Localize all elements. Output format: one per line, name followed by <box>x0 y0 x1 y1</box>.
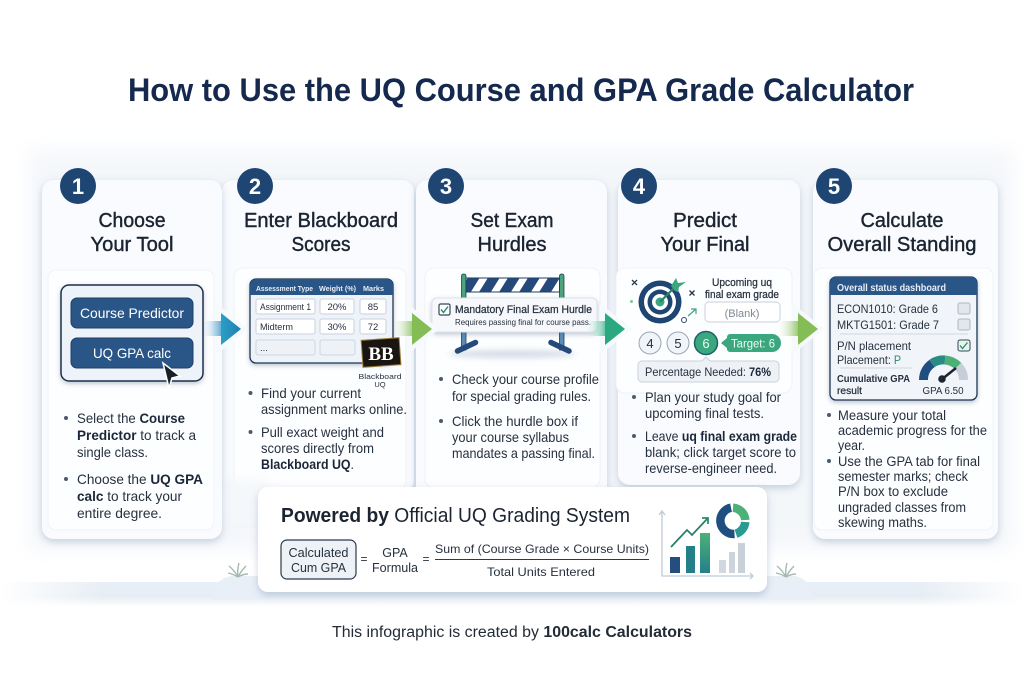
hurdle callout: Requires passing final for course pass. <box>455 317 591 327</box>
hurdle callout <box>432 298 597 332</box>
assessment table: 20% <box>327 302 347 313</box>
step 5 bullets: Use the GPA tab for final <box>838 454 980 469</box>
icon: cursor <box>163 363 180 388</box>
panel 4 inner <box>616 268 792 393</box>
step 3 heading <box>470 210 554 256</box>
step 3 number: 3 <box>440 174 452 199</box>
step 3 bullets: your course syllabus <box>452 429 569 445</box>
status dashboard: MKTG1501: Grade 7 <box>837 318 939 332</box>
step 5 heading: Overall Standing <box>828 234 976 256</box>
button: UQ GPA calc: UQ GPA calc <box>93 345 171 361</box>
step 4 heading: Your Final <box>660 234 750 256</box>
Blackboard logo: Blackboard <box>358 372 402 381</box>
assessment table: Marks <box>363 284 384 293</box>
step 1 bullets: single class. <box>77 444 148 460</box>
step 4 bullets: Leave uq final exam grade <box>645 428 797 444</box>
upcoming final exam grade field: final exam grade <box>705 289 779 301</box>
panel: step 3 <box>416 168 607 500</box>
status dashboard: ECON1010: Grade 6 <box>837 302 938 316</box>
step 5 heading: Calculate <box>860 210 944 232</box>
step 1 heading: Your Tool <box>90 234 174 256</box>
step 1 number <box>60 168 96 204</box>
grade selector: 5 <box>674 336 682 351</box>
step 1 bullets: Predictor to track a <box>77 427 196 443</box>
panel: step 1 <box>42 168 998 641</box>
grade selector: 6 <box>702 336 710 351</box>
step 1 bullets <box>64 410 203 521</box>
assessment table <box>250 279 393 363</box>
step 2 bullets: Pull exact weight and <box>261 424 384 440</box>
formula: Sum of (Course Grade × Course Units) <box>435 542 649 556</box>
step 3 heading: Hurdles <box>478 234 546 256</box>
assessment table: 30% <box>327 322 347 333</box>
panel 1 inner <box>48 270 214 530</box>
percentage needed <box>638 357 779 382</box>
step 2 heading <box>244 210 398 256</box>
step 2 bullets: assignment marks online. <box>261 401 407 417</box>
step 1 bullets: entire degree. <box>77 505 162 521</box>
soft fade below step 2 <box>212 480 268 520</box>
hurdle callout: Mandatory Final Exam Hurdle <box>455 304 592 316</box>
step 1 bullets: calc to track your <box>77 488 182 504</box>
arrow: step 1 to 2 <box>204 306 246 352</box>
icon: grass right <box>776 563 796 577</box>
step 4 bullets: blank; click target score to <box>645 444 796 460</box>
icon: grass left <box>228 563 248 577</box>
assessment table: Assessment Type <box>256 284 313 293</box>
panel: official grading system <box>258 487 767 592</box>
step 4 number: 4 <box>633 174 646 199</box>
step 1 heading <box>90 210 174 256</box>
assessment table: ... <box>260 343 268 354</box>
step 5 bullets: skewing maths. <box>838 515 927 530</box>
step 5 bullets <box>827 408 987 530</box>
step 4 bullets: Plan your study goal for <box>645 389 781 405</box>
step 3 number <box>428 168 464 204</box>
Blackboard logo <box>358 338 402 389</box>
arrow: step 3 to 4 <box>588 306 630 352</box>
step 1 heading: Choose <box>98 210 166 232</box>
status dashboard: Overall status dashboard <box>837 283 946 294</box>
formula: = <box>422 552 430 566</box>
step 5 heading <box>828 210 976 256</box>
Blackboard logo: UQ <box>374 380 386 389</box>
step 2 bullets: scores directly from <box>261 440 374 456</box>
panel: step 4 <box>616 168 800 485</box>
formula: = <box>360 552 368 566</box>
chart icon <box>659 508 753 579</box>
step 3 bullets: mandates a passing final. <box>452 445 595 461</box>
step 3 bullets: Click the hurdle box if <box>452 413 578 429</box>
button: course predictor: Course Predictor <box>80 305 184 321</box>
panel: step 2 <box>222 168 414 492</box>
step 4 bullets: upcoming final tests. <box>645 405 764 421</box>
step 1 bullets: Select the Course <box>77 410 185 426</box>
formula: Calculated <box>288 546 349 560</box>
step 5 bullets: P/N box to exclude <box>838 484 948 499</box>
status dashboard: GPA 6.50 <box>922 386 964 397</box>
formula: GPA <box>382 546 408 560</box>
formula <box>281 540 649 579</box>
upcoming final exam grade field <box>705 277 780 322</box>
assessment table: Weight (%) <box>319 284 356 293</box>
step 4 heading: Predict <box>673 210 737 232</box>
status dashboard: result <box>837 385 862 397</box>
footer credit: This infographic is created by 100calc Calculators <box>332 624 692 641</box>
assessment table: 85 <box>368 302 378 313</box>
step 1 number: 1 <box>72 174 84 199</box>
step 4 number <box>621 168 657 204</box>
step 4 bullets: reverse-engineer need. <box>645 460 777 476</box>
step 5 number: 5 <box>828 174 840 199</box>
panel 3 inner <box>425 268 600 488</box>
formula: Cum GPA <box>291 561 347 575</box>
panel 2 inner <box>234 268 406 490</box>
percentage needed: Percentage Needed: 76% <box>645 365 771 379</box>
step 5 bullets: semester marks; check <box>838 469 968 484</box>
step 5 bullets: academic progress for the <box>838 423 987 438</box>
button: UQ GPA calc <box>71 338 193 368</box>
status dashboard: P/N placement <box>837 339 912 353</box>
panel 5 inner <box>814 268 993 530</box>
arrow: step 2 to 3 <box>395 306 437 352</box>
assessment table: 72 <box>368 322 378 333</box>
hurdle illustration <box>448 274 576 358</box>
status dashboard: Placement: P <box>837 353 901 367</box>
status dashboard <box>830 277 977 400</box>
panel: step 5 <box>813 168 998 539</box>
title: How to Use the UQ Course and GPA Grade Calculator <box>128 72 914 108</box>
step 3 heading: Set Exam <box>470 210 554 232</box>
assessment table: Midterm <box>260 322 293 333</box>
upcoming final exam grade field: (Blank) <box>725 308 759 320</box>
button: course predictor <box>71 298 193 328</box>
step 1 bullets: Choose the UQ GPA <box>77 471 203 487</box>
status dashboard: Cumulative GPA <box>837 373 910 385</box>
upcoming final exam grade field: Upcoming uq <box>712 277 772 289</box>
formula: Formula <box>372 561 418 575</box>
step 2 bullets <box>248 385 407 472</box>
icon: target with arrow <box>630 278 696 324</box>
step 5 bullets: ungraded classes from <box>838 500 966 515</box>
assessment table: Assignment 1 <box>260 302 311 313</box>
step 3 bullets: Check your course profile <box>452 371 599 387</box>
grade selector: 4 <box>646 336 654 351</box>
step 2 bullets: Blackboard UQ. <box>261 456 354 472</box>
step 5 number <box>816 168 852 204</box>
step 4 bullets <box>632 389 797 476</box>
gauge <box>923 360 964 382</box>
step 3 bullets <box>439 371 599 461</box>
grade selector <box>639 332 781 354</box>
step 4 heading <box>660 210 750 256</box>
step 2 heading: Enter Blackboard <box>244 210 398 232</box>
formula: Total Units Entered <box>487 565 595 579</box>
grade selector: Target: 6 <box>731 338 775 350</box>
tool selector <box>61 285 203 388</box>
panel heading: Powered by Official UQ Grading System <box>281 505 630 527</box>
step 3 bullets: for special grading rules. <box>452 388 591 404</box>
step 5 bullets: Measure your total <box>838 408 946 423</box>
step 2 number: 2 <box>249 174 261 199</box>
step 2 bullets: Find your current <box>261 385 361 401</box>
step 5 bullets: year. <box>838 438 865 453</box>
step 2 heading: Scores <box>292 234 350 256</box>
Blackboard logo: BB <box>368 344 394 365</box>
step 2 number <box>237 168 273 204</box>
arrow: step 4 to 5 <box>780 306 822 352</box>
